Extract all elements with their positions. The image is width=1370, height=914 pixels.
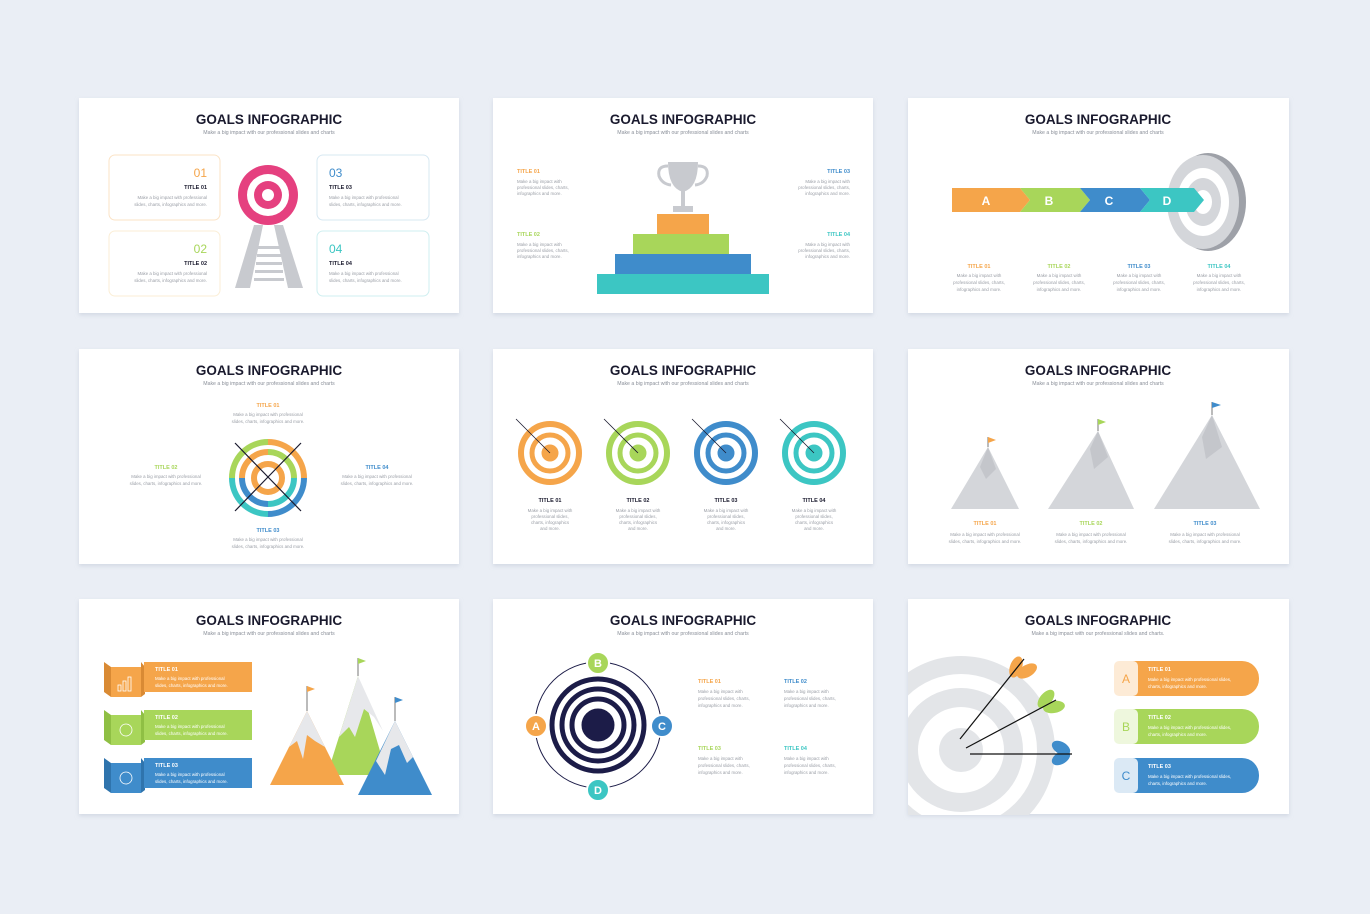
ribbon 01: TITLE 01 (155, 667, 178, 673)
text 01: professional slides, charts, (517, 185, 569, 190)
text blocks: professional slides, charts, (784, 763, 836, 768)
box 01: Make a big impact with professional (137, 195, 207, 200)
ribbon 03: slides, charts, infographics and more. (155, 779, 228, 784)
text 03 (798, 169, 851, 196)
slide 1: target ladder (79, 98, 459, 313)
box 04: TITLE 04 (329, 261, 353, 267)
text 04: TITLE 04 (366, 465, 389, 471)
pill C (1114, 758, 1259, 793)
captions (528, 498, 837, 531)
ribbon 02: TITLE 02 (155, 715, 178, 721)
subtitle: Make a big impact with our professional slides and charts. (1032, 631, 1164, 637)
text 03: Make a big impact with (805, 179, 851, 184)
ribbon 03 (104, 758, 252, 793)
slide 3: arrows to target (908, 98, 1289, 313)
captions: and more. (716, 526, 736, 531)
icon: gray target with darts (908, 656, 1072, 815)
text blocks (698, 679, 836, 775)
text blocks: infographics and more. (784, 703, 829, 708)
captions: TITLE 03 (1194, 521, 1216, 527)
text 01 (232, 403, 304, 424)
mountains with flags (270, 658, 432, 795)
text 03: TITLE 03 (827, 169, 850, 175)
slide 7: ribbons and colored mountains (79, 599, 459, 814)
ribbon 03: Make a big impact with professional (155, 772, 225, 777)
text 04: Make a big impact with (805, 242, 851, 247)
text 04: TITLE 04 (827, 232, 851, 238)
box 03: TITLE 03 (329, 185, 352, 191)
title: GOALS INFOGRAPHIC (196, 363, 342, 378)
text blocks: infographics and more. (784, 770, 829, 775)
text 01: TITLE 01 (257, 403, 279, 409)
text 03: Make a big impact with professional (233, 537, 303, 542)
text 02 (130, 465, 202, 486)
text blocks: Make a big impact with (698, 689, 743, 694)
captions: TITLE 02 (1080, 521, 1102, 527)
captions: charts, infographics (531, 520, 570, 525)
subtitle: Make a big impact with our professional slides and charts (1032, 381, 1164, 387)
text columns: Make a big impact with (1197, 273, 1242, 278)
captions (949, 521, 1241, 544)
subtitle: Make a big impact with our professional slides and charts (1032, 130, 1164, 136)
pill B: Make a big impact with professional slides, (1148, 725, 1231, 730)
text 01: Make a big impact with professional (233, 412, 303, 417)
title: GOALS INFOGRAPHIC (196, 613, 342, 628)
icon: pink target (238, 165, 298, 225)
icon: trophy (659, 162, 707, 212)
text 03: slides, charts, infographics and more. (232, 544, 304, 549)
box 02: TITLE 02 (184, 261, 207, 267)
box 02: Make a big impact with professional (137, 271, 207, 276)
captions: Make a big impact with (792, 508, 837, 513)
text columns: TITLE 01 (968, 264, 990, 270)
pill C: TITLE 03 (1148, 764, 1171, 770)
arrow chain: C (1105, 194, 1114, 208)
mountains (951, 402, 1260, 509)
box 04: slides, charts, infographics and more. (329, 278, 402, 283)
text 01 (517, 169, 569, 196)
subtitle: Make a big impact with our professional slides and charts (203, 381, 335, 387)
box 03: Make a big impact with professional (329, 195, 399, 200)
ribbon 02 (104, 710, 252, 745)
text blocks: infographics and more. (698, 770, 743, 775)
icon: target 3d (1167, 153, 1246, 251)
pill B: TITLE 02 (1148, 715, 1171, 721)
text columns: professional slides, charts, (1193, 280, 1245, 285)
captions: charts, infographics (619, 520, 658, 525)
text 01: infographics and more. (517, 191, 562, 196)
captions: slides, charts, infographics and more. (1169, 539, 1241, 544)
box 01: TITLE 01 (184, 185, 207, 191)
arrow chain: B (1045, 194, 1054, 208)
title: GOALS INFOGRAPHIC (1025, 613, 1171, 628)
subtitle: Make a big impact with our professional slides and charts (617, 130, 749, 136)
text columns: infographics and more. (957, 287, 1001, 292)
captions: TITLE 01 (974, 521, 996, 527)
text 04 (798, 232, 851, 259)
captions: Make a big impact with (704, 508, 749, 513)
icon: navy target (535, 662, 661, 788)
text 03: infographics and more. (805, 191, 850, 196)
captions: professional slides, (531, 514, 569, 519)
box 01: 01 (194, 166, 207, 180)
arrow chain: D (1163, 194, 1172, 208)
title: GOALS INFOGRAPHIC (1025, 363, 1171, 378)
text columns: infographics and more. (1037, 287, 1081, 292)
text 04: slides, charts, infographics and more. (341, 481, 413, 486)
text columns: Make a big impact with (1117, 273, 1162, 278)
pill C: charts, infographics and more. (1148, 781, 1207, 786)
text 03 (232, 528, 304, 549)
ladder (235, 225, 303, 288)
arrow chain: A (982, 194, 991, 208)
text columns: TITLE 02 (1048, 264, 1070, 270)
box 02: 02 (194, 242, 207, 256)
captions: and more. (804, 526, 824, 531)
captions: TITLE 01 (539, 498, 561, 504)
text columns: infographics and more. (1117, 287, 1161, 292)
pyramid (597, 214, 769, 294)
text columns: infographics and more. (1197, 287, 1241, 292)
box 04: 04 (329, 242, 343, 256)
box 02: slides, charts, infographics and more. (134, 278, 207, 283)
pill B: charts, infographics and more. (1148, 732, 1207, 737)
captions: Make a big impact with professional (1170, 532, 1240, 537)
icon: segmented target (232, 442, 304, 514)
text blocks: TITLE 01 (698, 679, 721, 685)
captions: Make a big impact with professional (1056, 532, 1126, 537)
text blocks: Make a big impact with (784, 756, 829, 761)
letter badges (525, 652, 673, 801)
text 02: TITLE 02 (155, 465, 177, 471)
text columns: Make a big impact with (1037, 273, 1082, 278)
text 02: infographics and more. (517, 254, 562, 259)
slide 2: trophy pyramid (493, 98, 873, 313)
text columns: professional slides, charts, (1033, 280, 1085, 285)
title: GOALS INFOGRAPHIC (196, 112, 342, 127)
letter badges: A (532, 721, 540, 733)
text 02: Make a big impact with professional (131, 474, 201, 479)
text columns: professional slides, charts, (1113, 280, 1165, 285)
title: GOALS INFOGRAPHIC (610, 112, 756, 127)
text columns: TITLE 03 (1128, 264, 1150, 270)
text blocks: Make a big impact with (784, 689, 829, 694)
text columns: TITLE 04 (1208, 264, 1231, 270)
text 04: professional slides, charts, (798, 248, 850, 253)
captions: TITLE 04 (803, 498, 826, 504)
letter badges: C (658, 721, 666, 733)
pill A: TITLE 01 (1148, 667, 1171, 673)
ribbon 01: Make a big impact with professional (155, 676, 225, 681)
ribbon 01: slides, charts, infographics and more. (155, 683, 228, 688)
text 01: TITLE 01 (517, 169, 540, 175)
ribbon 02: slides, charts, infographics and more. (155, 731, 228, 736)
text 02: TITLE 02 (517, 232, 540, 238)
pill C: C (1122, 769, 1131, 783)
box 03 (317, 155, 429, 220)
box 03: 03 (329, 166, 343, 180)
captions: professional slides, (707, 514, 745, 519)
targets row (516, 419, 843, 482)
text blocks: Make a big impact with (698, 756, 743, 761)
subtitle: Make a big impact with our professional slides and charts (203, 631, 335, 637)
slide 5: four targets (493, 349, 873, 564)
captions: and more. (540, 526, 560, 531)
text blocks: TITLE 03 (698, 746, 721, 752)
slide 8: navy target with letters (493, 599, 873, 814)
pill A: charts, infographics and more. (1148, 684, 1207, 689)
pill A: Make a big impact with professional slides, (1148, 677, 1231, 682)
text 03: TITLE 03 (257, 528, 279, 534)
captions: Make a big impact with (616, 508, 661, 513)
captions: professional slides, (619, 514, 657, 519)
text blocks: professional slides, charts, (784, 696, 836, 701)
text 02 (517, 232, 569, 259)
pill A (1114, 661, 1259, 696)
text 04: Make a big impact with professional (342, 474, 412, 479)
captions: TITLE 02 (627, 498, 649, 504)
pill B (1114, 709, 1259, 744)
slide 6: gray mountains (908, 349, 1289, 564)
subtitle: Make a big impact with our professional slides and charts (617, 631, 749, 637)
slide 4: crossed arrows target (79, 349, 459, 564)
box 01: slides, charts, infographics and more. (134, 202, 207, 207)
title: GOALS INFOGRAPHIC (610, 363, 756, 378)
box 01 (109, 155, 220, 220)
box 04 (317, 231, 429, 296)
text columns: professional slides, charts, (953, 280, 1005, 285)
text 03: professional slides, charts, (798, 185, 850, 190)
pill C: Make a big impact with professional slides, (1148, 774, 1231, 779)
text blocks: TITLE 02 (784, 679, 807, 685)
captions: TITLE 03 (715, 498, 737, 504)
box 03: slides, charts, infographics and more. (329, 202, 402, 207)
box 02 (109, 231, 220, 296)
captions: slides, charts, infographics and more. (1055, 539, 1127, 544)
letter badges: D (594, 785, 602, 797)
ribbon 01 (104, 662, 252, 697)
subtitle: Make a big impact with our professional slides and charts (203, 130, 335, 136)
text columns (953, 264, 1245, 292)
text blocks: professional slides, charts, (698, 763, 750, 768)
text 02: slides, charts, infographics and more. (130, 481, 202, 486)
text 01: Make a big impact with (517, 179, 562, 184)
text columns: Make a big impact with (957, 273, 1002, 278)
ribbon 02: Make a big impact with professional (155, 724, 225, 729)
text 02: Make a big impact with (517, 242, 562, 247)
captions: charts, infographics (707, 520, 746, 525)
text 01: slides, charts, infographics and more. (232, 419, 304, 424)
pill B: B (1122, 720, 1130, 734)
captions: charts, infographics (795, 520, 834, 525)
title: GOALS INFOGRAPHIC (1025, 112, 1171, 127)
text 02: professional slides, charts, (517, 248, 569, 253)
text 04 (341, 465, 413, 486)
arrow chain (952, 188, 1204, 212)
captions: and more. (628, 526, 648, 531)
captions: Make a big impact with (528, 508, 573, 513)
text blocks: TITLE 04 (784, 746, 808, 752)
title: GOALS INFOGRAPHIC (610, 613, 756, 628)
letter badges: B (594, 658, 602, 670)
captions: professional slides, (795, 514, 833, 519)
text blocks: professional slides, charts, (698, 696, 750, 701)
ribbon 03: TITLE 03 (155, 763, 178, 769)
pill A: A (1122, 672, 1130, 686)
subtitle: Make a big impact with our professional slides and charts (617, 381, 749, 387)
captions: Make a big impact with professional (950, 532, 1020, 537)
box 04: Make a big impact with professional (329, 271, 399, 276)
slide 9: darts and pills (907, 599, 1290, 817)
captions: slides, charts, infographics and more. (949, 539, 1021, 544)
text blocks: infographics and more. (698, 703, 743, 708)
text 04: infographics and more. (805, 254, 850, 259)
